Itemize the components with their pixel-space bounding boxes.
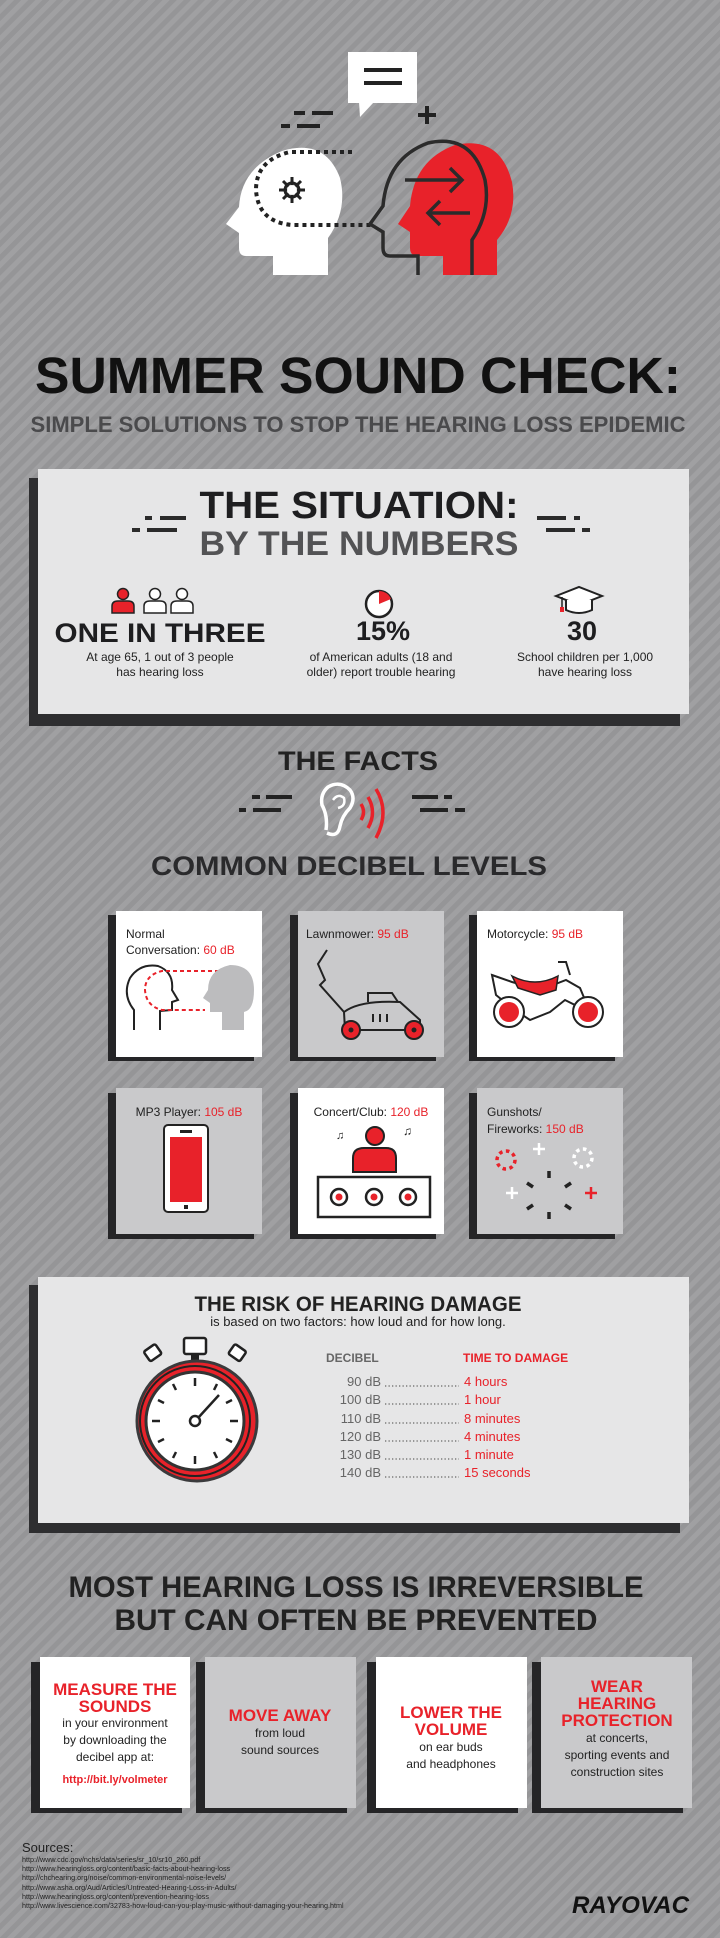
tip: move away: MOVE AWAY — [229, 1706, 332, 1725]
stat: one in three: At age 65, 1 out of 3 people — [86, 650, 234, 664]
icon: red head — [370, 141, 513, 275]
panel: situation by the numbers — [29, 469, 689, 726]
heading: most hearing loss is irreversible — [68, 1571, 644, 1637]
icon: dashes — [281, 113, 333, 126]
card: concert/club: Concert/Club: 120 dB — [314, 1105, 428, 1119]
stat: 30: have hearing loss — [538, 665, 632, 679]
tip: wear hearing protection: WEAR — [591, 1677, 643, 1696]
table: decibel vs time to damage: 90 dB — [347, 1374, 381, 1389]
card: normal conversation — [108, 911, 262, 1061]
table: decibel vs time to damage: 110 dB — [341, 1411, 381, 1426]
subtitle: SIMPLE SOLUTIONS TO STOP THE HEARING LOSS EPIDEMIC — [30, 412, 686, 437]
card: gunshots/fireworks: Gunshots/ — [487, 1105, 542, 1119]
stat: 30: 30 — [567, 616, 597, 646]
table: decibel vs time to damage: DECIBEL — [326, 1351, 379, 1365]
card: gunshots/fireworks: Fireworks: 150 dB — [487, 1122, 584, 1136]
card: motorcycle: Motorcycle: 95 dB — [487, 927, 583, 941]
title: SUMMER SOUND CHECK: — [35, 347, 681, 404]
stat: 15%: of American adults (18 and — [310, 650, 452, 664]
table: decibel vs time to damage — [326, 1351, 568, 1480]
card: concert/club: ♫ — [336, 1130, 344, 1142]
tip: wear hearing protection: PROTECTION — [561, 1711, 673, 1730]
tip: measure the sounds: MEASURE THE — [53, 1680, 177, 1699]
sources — [22, 1840, 344, 1910]
heading: most hearing loss is irreversible: MOST HEARING LOSS IS IRREVERSIBLE — [68, 1571, 644, 1604]
tip: move away — [196, 1657, 356, 1813]
table: decibel vs time to damage: 4 minutes — [464, 1429, 521, 1444]
stat: 15%: older) report trouble hearing — [307, 665, 455, 679]
stat: 30 — [517, 587, 653, 679]
card: lawnmower — [290, 911, 444, 1061]
table: decibel vs time to damage: 120 dB — [340, 1429, 381, 1444]
sources: http://www.livescience.com/32783-how-loud-can-you-play-music-without-damaging-your-hearing.html — [22, 1901, 344, 1910]
table: decibel vs time to damage: 1 minute — [464, 1447, 514, 1462]
card: mp3 player: MP3 Player: 105 dB — [136, 1105, 242, 1119]
tip: measure the sounds: http://bit.ly/volmeter — [62, 1774, 168, 1786]
tip: measure the sounds: in your environment — [62, 1716, 168, 1730]
icon: speech bubble — [348, 52, 417, 117]
tip: measure the sounds: by downloading the — [63, 1733, 167, 1747]
table: decibel vs time to damage: 130 dB — [340, 1447, 381, 1462]
stat: one in three — [54, 588, 266, 679]
stat: 15% — [307, 591, 455, 679]
panel: risk of hearing damage: is based on two factors: how loud and for how long. — [210, 1314, 506, 1329]
tip: wear hearing protection: construction sites — [571, 1765, 663, 1779]
tip: move away: sound sources — [241, 1743, 319, 1757]
icon: graduation cap — [556, 587, 602, 613]
card: normal conversation: Normal — [126, 927, 165, 941]
icon: plus — [418, 106, 436, 124]
sources: http://www.hearingloss.org/content/basic-facts-about-hearing-loss — [22, 1864, 231, 1873]
table: decibel vs time to damage: 140 dB — [340, 1465, 381, 1480]
stat: 15%: 15% — [356, 616, 410, 646]
tip: lower the volume: VOLUME — [415, 1720, 487, 1739]
sources: http://www.hearingloss.org/content/prevention-hearing-loss — [22, 1892, 209, 1901]
logo: rayovac: RAYOVAC — [572, 1892, 690, 1919]
icon: people — [112, 588, 193, 613]
tip: measure the sounds — [31, 1657, 190, 1813]
tip: lower the volume: and headphones — [406, 1757, 496, 1771]
icon: ear with sound waves — [239, 784, 465, 838]
tip: wear hearing protection: at concerts, — [586, 1731, 648, 1745]
heading: common decibel levels: COMMON DECIBEL LEVELS — [151, 851, 547, 881]
card: lawnmower: Lawnmower: 95 dB — [306, 927, 409, 941]
card: normal conversation: Conversation: 60 dB — [126, 943, 235, 957]
table: decibel vs time to damage: TIME TO DAMAGE — [463, 1351, 568, 1365]
tip: measure the sounds: decibel app at: — [76, 1750, 154, 1764]
heading: the situation: BY THE NUMBERS — [200, 525, 518, 563]
sources: http://www.asha.org/Aud/Articles/Untreated-Hearing-Loss-in-Adults/ — [22, 1883, 237, 1892]
card: motorcycle — [469, 911, 623, 1061]
tip: wear hearing protection: HEARING — [578, 1694, 656, 1713]
sources: Sources: — [22, 1840, 73, 1855]
stat: one in three: ONE IN THREE — [54, 618, 266, 648]
stat: one in three: has hearing loss — [116, 665, 204, 679]
tip: lower the volume: LOWER THE — [400, 1703, 502, 1722]
table: decibel vs time to damage: 15 seconds — [464, 1465, 531, 1480]
sources: http://chchearing.org/noise/common-environmental-noise-levels/ — [22, 1873, 226, 1882]
tip: lower the volume: on ear buds — [419, 1740, 483, 1754]
card: concert/club: ♫ — [403, 1124, 412, 1138]
table: decibel vs time to damage: 8 minutes — [464, 1411, 521, 1426]
tip: move away: from loud — [255, 1726, 305, 1740]
icon: white head — [226, 148, 372, 275]
card: gunshots/fireworks — [469, 1088, 623, 1239]
panel: risk of hearing damage — [29, 1277, 689, 1533]
sources: http://www.cdc.gov/nchs/data/series/sr_10/sr10_260.pdf — [22, 1855, 200, 1864]
card: mp3 player — [108, 1088, 262, 1239]
stat: 30: School children per 1,000 — [517, 650, 653, 664]
table: decibel vs time to damage: 4 hours — [464, 1374, 508, 1389]
icon: stopwatch — [137, 1338, 257, 1481]
heading: the situation: THE SITUATION: — [200, 485, 518, 527]
table: decibel vs time to damage: 100 dB — [340, 1392, 381, 1407]
tip: wear hearing protection — [532, 1657, 692, 1813]
hero icon: two heads — [226, 52, 513, 275]
tip: wear hearing protection: sporting events and — [565, 1748, 669, 1762]
card: concert/club — [290, 1088, 444, 1239]
tip: measure the sounds: SOUNDS — [79, 1697, 151, 1716]
table: decibel vs time to damage: 1 hour — [464, 1392, 502, 1407]
heading: risk: THE RISK OF HEARING DAMAGE — [194, 1293, 522, 1316]
heading: most hearing loss is irreversible: BUT CAN OFTEN BE PREVENTED — [114, 1604, 598, 1637]
heading: the situation — [132, 485, 590, 563]
icon: pie clock — [366, 591, 392, 617]
tip: lower the volume — [367, 1657, 527, 1813]
heading: the facts: THE FACTS — [278, 746, 438, 776]
